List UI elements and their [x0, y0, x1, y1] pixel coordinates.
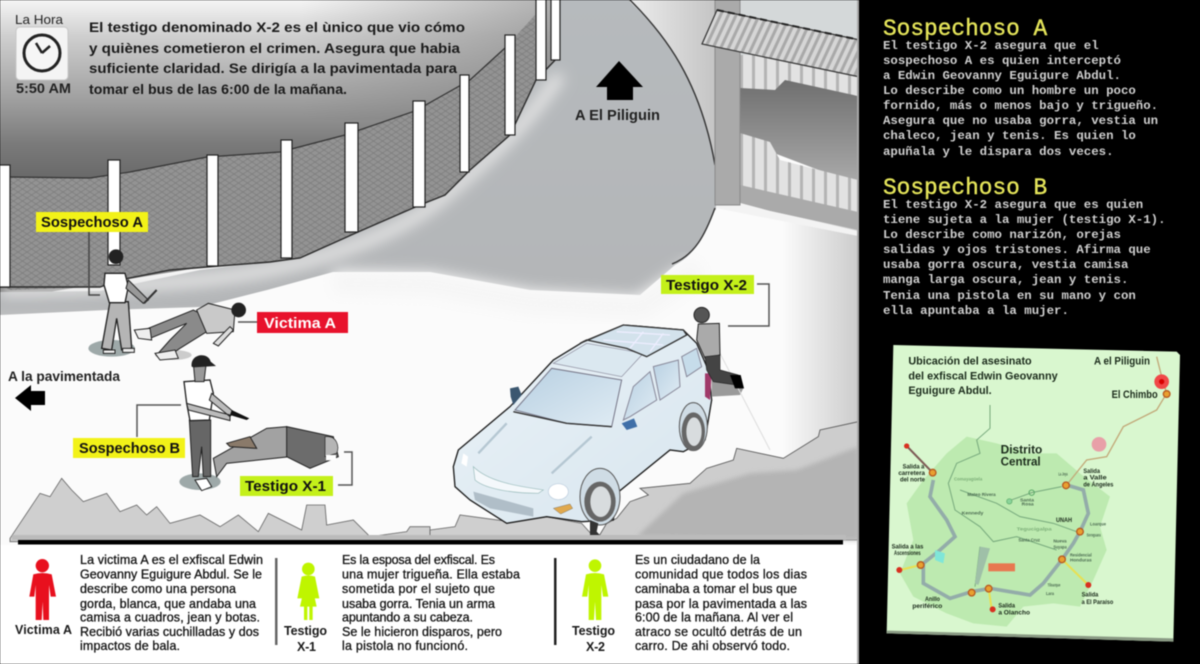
map exit labels: Salida: [998, 603, 1016, 609]
map small place labels: Santa: [1020, 498, 1035, 503]
map small place labels: Honduras: [1070, 558, 1092, 563]
shade at lower edge: [12, 535, 846, 540]
map exit labels: periférico: [912, 604, 943, 610]
text: witness X-1 description: sometida por el sujeto que: [342, 582, 495, 596]
text: suspect A description: Lo describe como un hombre un poco: [883, 84, 1136, 98]
label: Testigo X-2: Testigo X-2: [666, 278, 747, 294]
map exit labels: Salida: [1083, 469, 1101, 475]
text: witness X-1 description: [342, 553, 520, 653]
map small place labels: [954, 471, 1107, 596]
map small place labels: Tegucigalpa: [1017, 527, 1052, 532]
text: suspect B description: usaba gorra oscura, vestia camisa: [883, 258, 1129, 272]
panel: crime scene illustration: [0, 0, 860, 664]
map small place labels: Lara: [1046, 591, 1055, 596]
map small place labels: Loarque: [1090, 521, 1107, 526]
text: suspect B description: Tenia una pistola en su mano y con: [883, 289, 1136, 303]
map title: El Chimbo: [1112, 389, 1158, 401]
caption: Victima A: Victima A: [15, 623, 72, 637]
text: witness X-2 description: 6:00 de la mañana. Al ver el: [635, 610, 793, 624]
caption: Testigo X-2: [572, 624, 615, 654]
intro text: tomar el bus de las 6:00 de la mañana.: [89, 81, 347, 97]
figure: witness X-2: [694, 307, 770, 450]
panel: black sidebar: [859, 0, 1200, 664]
text: victim description: Recibió varias cuchilladas y dos: [80, 625, 259, 639]
car: [453, 325, 712, 539]
icon: green woman: [297, 563, 319, 620]
floor near the gate: [690, 205, 858, 500]
ground with jagged edge: [10, 422, 858, 542]
direction label: pavimentada: A la pavimentada: [8, 369, 120, 384]
map district label: Distrito: [1001, 442, 1042, 456]
map exit labels: Salida a las: [892, 545, 924, 551]
fence: [0, 0, 560, 290]
map exit labels: Anillo: [925, 597, 940, 603]
text: suspect A description: a Edwin Geovanny Eguigure Abdul.: [883, 69, 1121, 83]
text: witness X-2 description: comunidad que todos los dias: [635, 568, 807, 582]
icon: red person: [29, 559, 56, 620]
fade from road to ground: [333, 268, 700, 308]
label: Sospechoso A: [36, 212, 148, 295]
map district label: [1001, 442, 1042, 468]
text: victim description: gorda, blanca, que andaba una: [80, 597, 256, 611]
map title: [908, 355, 1158, 401]
map exit labels: del norte: [900, 477, 926, 483]
text: victim description: La victima A es el exfiscal Edwin: [80, 553, 263, 567]
panel: legend strip: [0, 540, 858, 664]
label: Sospechoso B: [73, 405, 185, 458]
text: victim description: describe como una persona: [80, 582, 236, 596]
text: victim description: [80, 553, 263, 653]
text: suspect B description: salidas y ojos tristones. Afirma que: [883, 243, 1151, 257]
map exit labels: [892, 464, 1114, 617]
label: Victima A: [238, 312, 348, 333]
text: suspect A description: Asegura que no usaba gorra, vestia un: [883, 114, 1158, 128]
map exit labels: a Olancho: [998, 611, 1030, 617]
label: Testigo X-1: Testigo X-1: [245, 479, 326, 495]
map exit labels: a Valle: [1083, 476, 1107, 482]
text: witness X-2 description: [635, 553, 807, 653]
text: victim description: impactos de bala.: [80, 639, 180, 653]
light edge of the road: [0, 75, 560, 290]
intro text: El testigo denominado X-2 es el ùnico que vio cómo: [89, 19, 465, 35]
heading: Sospechoso A: Sospechoso A: [883, 16, 1047, 42]
map exit labels: UNAH: [1056, 518, 1072, 524]
direction label: El Piliguin: A El Piliguin: [575, 108, 660, 124]
wall beside the road: [630, 0, 716, 210]
map title: del exfiscal Edwin Geovanny: [908, 370, 1059, 382]
intro text: suficiente claridad. Se dirigía a la pavimentada para: [89, 60, 457, 76]
map small place labels: Nueva: [1053, 539, 1067, 544]
text: suspect A description: apuñala y le dispara dos veces.: [883, 145, 1114, 159]
text: suspect B description: El testigo X-2 asegura que es quien: [883, 198, 1143, 212]
text: suspect B description: manga larga oscura, jean y tenis.: [883, 273, 1128, 287]
text: witness X-1 description: usaba gorra. Tenia un arma: [342, 597, 495, 611]
map title: A el Piliguin: [1094, 355, 1150, 367]
text: suspect A description: chaleco, jean y tenis. Es quien lo: [883, 129, 1136, 143]
text: witness X-2 description: pasa por la pavimentada a las: [635, 597, 807, 611]
map small place labels: Tiloarque: [1048, 583, 1061, 588]
icon: green man: [582, 559, 608, 620]
text: witness X-2 description: atraco se ocultó detrás de un: [635, 625, 802, 639]
road to El Piliguin: [0, 0, 716, 315]
text: suspect B description: ella apuntaba a la mujer.: [883, 304, 1069, 318]
text: witness X-1 description: la pistola no funcionó.: [342, 639, 468, 653]
sky behind the fence: [0, 0, 640, 300]
caption: Testigo X-2: X-2: [586, 640, 605, 654]
map small place labels: Rosa: [1022, 502, 1034, 507]
text: suspect B description: Lo describe como narizón, orejas: [883, 228, 1121, 242]
text: witness X-1 description: apuntando a su cabeza.: [342, 610, 473, 624]
text: suspect B description: [883, 198, 1166, 318]
map title: Ubicación del asesinato: [908, 356, 1032, 368]
map small place labels: Kennedy: [962, 511, 984, 516]
map exit labels: carretera: [898, 471, 926, 477]
text: victim description: Geovanny Eguigure Abdul. Se le: [80, 568, 262, 582]
map small place labels: Soroguara: [1087, 533, 1101, 538]
intro text: y quiènes cometieron el crimen. Asegura que habia: [89, 40, 460, 56]
text: witness X-2 description: carro. De ahi observó todo.: [635, 639, 790, 653]
caption: Testigo X-1: Testigo: [284, 624, 327, 638]
text: suspect A description: sospechoso A es quien interceptó: [883, 54, 1121, 68]
label: Sospechoso B: Sospechoso B: [79, 441, 180, 457]
map exit labels: a El Paraíso: [1082, 600, 1114, 606]
map: location of the murder: [887, 345, 1180, 642]
map small place labels: Santa Cruz: [1018, 537, 1040, 542]
map title: Eguigure Abdul.: [908, 385, 992, 397]
map exit labels: Salida: [1082, 593, 1099, 599]
heading: Sospechoso B: Sospechoso B: [883, 175, 1047, 201]
map small place labels: La Joya: [1058, 471, 1068, 476]
text: witness X-2 description: caminaba a tomar el bus que: [635, 582, 797, 596]
label: Testigo X-1: [240, 452, 352, 496]
map small place labels: Residencial: [1070, 553, 1092, 558]
map small place labels: Mateo Rivera: [967, 492, 996, 497]
map small place labels: Suyapa: [1053, 544, 1067, 549]
map exit labels: de Ángeles: [1083, 481, 1114, 488]
text: witness X-2 description: Es un ciudadano de la: [635, 553, 760, 567]
caption: Testigo X-1: [284, 624, 327, 654]
arrow: to El Piliguin: [596, 61, 643, 100]
map minor roads: [948, 405, 1077, 587]
map district area: [900, 437, 1110, 627]
map exit labels: Salida a: [903, 464, 925, 470]
map target marker: [1154, 374, 1169, 389]
text: witness X-1 description: Se le hicieron disparos, pero: [342, 625, 502, 639]
road outline: [630, 0, 715, 264]
intro text: [89, 19, 465, 97]
text: suspect B description: tiene sujeta a la mujer (testigo X-1).: [883, 213, 1166, 227]
text: victim description: camisa a cuadros, jean y botas.: [80, 610, 260, 624]
clock brand: La Hora: [15, 12, 64, 27]
map small place labels: Comayagüela: [954, 477, 983, 482]
caption: Testigo X-2: Testigo: [572, 624, 615, 638]
gate and column: [702, 0, 860, 236]
figure: suspect A: [88, 249, 157, 357]
text: suspect A description: [883, 39, 1158, 159]
label: Testigo X-2: [661, 275, 769, 326]
text: witness X-1 description: Es la esposa del exfiscal. Es: [342, 553, 495, 567]
figure: witness X-1: [213, 427, 338, 477]
text: suspect A description: fornido, más o menos bajo y trigueño.: [883, 99, 1158, 113]
map ring road: [923, 480, 1088, 598]
caption: Testigo X-1: X-1: [297, 640, 316, 654]
sky shade on the right: [300, 0, 640, 120]
figure: suspect B: [179, 355, 249, 491]
label: Victima A: Victima A: [264, 315, 336, 332]
text: suspect A description: El testigo X-2 asegura que el: [883, 39, 1099, 53]
map district label: Central: [1001, 454, 1041, 468]
figure: victim A: [134, 303, 246, 360]
clock icon: [16, 27, 68, 80]
map road to El Piliguin: [1067, 357, 1167, 485]
arrow: to pavimentada: [15, 385, 45, 411]
map exit labels: Ascensiones: [894, 551, 921, 557]
text: witness X-1 description: una mujer trigueña. Ella estaba: [342, 568, 520, 582]
label: Sospechoso A: Sospechoso A: [41, 215, 144, 231]
clock time: 5:50 AM: [16, 81, 71, 96]
